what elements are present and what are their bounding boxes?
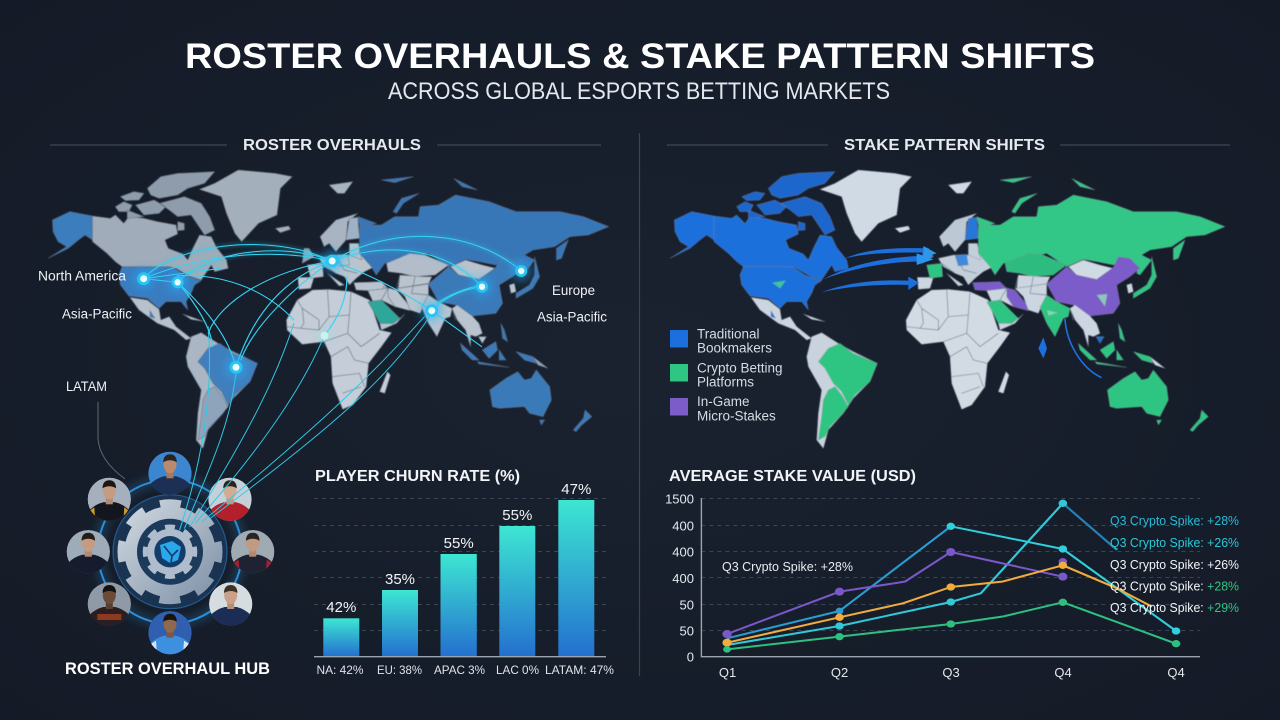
- bar: LAC: 55%: [502, 507, 532, 524]
- chart title: AVERAGE STAKE VALUE (USD): [669, 468, 916, 485]
- map labels: [38, 268, 607, 394]
- node: China: [473, 278, 491, 296]
- hub label: ROSTER OVERHAUL HUB: [65, 659, 270, 678]
- annotation: Q3 crypto spike: Q3 Crypto Spike: +28%: [722, 559, 853, 574]
- label: Asia-Pacific west: Asia-Pacific: [62, 306, 132, 322]
- node: North America East: [169, 273, 187, 291]
- bar: NA: [323, 599, 359, 656]
- player avatar 6: [88, 582, 131, 626]
- x axis labels: Q3: [942, 665, 960, 680]
- y axis labels: 400: [672, 571, 694, 586]
- bar: LATAM: 47%: [561, 481, 591, 498]
- annotation list: crypto spike by series: Q3 Crypto Spike: +29%: [1110, 600, 1239, 615]
- y axis labels: 0: [687, 650, 694, 664]
- bar: EU: 35%: [385, 571, 415, 588]
- x axis labels: Q4: [1054, 665, 1072, 680]
- x axis labels: Q1: [719, 665, 736, 680]
- x axis labels: Q2: [831, 665, 848, 680]
- y axis labels: [665, 492, 694, 664]
- annotation list: crypto spike by series: Q3 Crypto Spike: +26%: [1110, 535, 1239, 550]
- node: India: [422, 301, 442, 321]
- legend item: traditional bookmakers: Bookmakers: [697, 340, 772, 356]
- line chart: average stake value: [665, 468, 1239, 680]
- network: transfer connection lines: [144, 236, 521, 530]
- series: teal blue: [727, 503, 1117, 638]
- annotation list: crypto spike by series: [1110, 513, 1239, 615]
- annotation list: crypto spike by series: Q3 Crypto Spike: +26%: [1110, 557, 1239, 572]
- x axis labels: Q4: [1167, 665, 1185, 680]
- category labels: EU: 38%: [377, 665, 422, 677]
- node: North America West: [135, 270, 153, 288]
- icon: gear: [122, 503, 218, 600]
- player avatar 2: [208, 478, 252, 521]
- annotation list: crypto spike by series: Q3 Crypto Spike: +28%: [1110, 578, 1239, 594]
- hub ring: [98, 480, 242, 624]
- bar: APAC: [440, 535, 477, 656]
- node: Brazil: [226, 357, 246, 377]
- subtitle: ACROSS GLOBAL ESPORTS BETTING MARKETS: [388, 78, 890, 105]
- legend item: crypto betting platforms: Crypto Betting: [697, 360, 783, 376]
- y axis labels: 50: [680, 598, 694, 612]
- series: sky: [727, 501, 1066, 645]
- category labels: [316, 665, 614, 677]
- arrow: South Asia curve and marker: [1038, 319, 1101, 377]
- legend: betting platforms: [670, 326, 783, 424]
- map: roster overhauls world map: [48, 170, 609, 448]
- hub: roster overhaul hub: [65, 452, 274, 678]
- node: Africa: [318, 330, 330, 342]
- heading: stake pattern shifts: STAKE PATTERN SHIFTS: [844, 137, 1045, 154]
- node: Europe: [322, 251, 342, 271]
- bar chart: player churn rate: [314, 468, 614, 677]
- y axis labels: 400: [672, 544, 694, 560]
- network nodes: [135, 251, 530, 377]
- map: stake pattern shifts world map: [670, 170, 1225, 448]
- legend item: traditional bookmakers: Traditional: [697, 326, 760, 342]
- label: Asia-Pacific east: Asia-Pacific: [537, 310, 607, 324]
- bar: APAC: 55%: [444, 535, 474, 552]
- category labels: NA: 42%: [316, 665, 364, 677]
- y axis labels: 1500: [665, 492, 694, 506]
- legend item: traditional bookmakers: [670, 326, 772, 356]
- label: LATAM: LATAM: [66, 379, 107, 394]
- annotation list: crypto spike by series: Q3 Crypto Spike: +28%: [1110, 513, 1239, 528]
- legend item: in-game micro-stakes: [670, 394, 776, 424]
- bar: LATAM: [558, 481, 594, 656]
- series: orange: [724, 563, 1152, 646]
- label: Europe: Europe: [552, 283, 595, 298]
- series: green: [724, 600, 1179, 652]
- bar: LAC: [499, 507, 535, 656]
- heading: roster overhauls: ROSTER OVERHAULS: [243, 137, 421, 154]
- title: ROSTER OVERHAULS & STAKE PATTERN SHIFTS: [185, 37, 1095, 76]
- player avatar 5: [148, 611, 192, 655]
- node: Japan: [512, 262, 530, 280]
- legend item: crypto betting platforms: Platforms: [697, 374, 754, 390]
- arrows: stake flows to Europe: [822, 246, 937, 292]
- category labels: LAC 0%: [496, 665, 539, 677]
- x axis labels: [719, 665, 1185, 680]
- legend item: in-game micro-stakes: In-Game: [697, 394, 750, 409]
- label: North America: North America: [38, 268, 127, 284]
- y axis labels: 50: [680, 624, 694, 638]
- chart title: PLAYER CHURN RATE (%): [315, 468, 520, 485]
- y axis labels: 400: [672, 518, 694, 534]
- legend item: crypto betting platforms: [670, 360, 783, 390]
- series: cyan: [948, 524, 1179, 634]
- legend item: in-game micro-stakes: Micro-Stakes: [697, 408, 776, 424]
- player avatar 7: [67, 530, 110, 574]
- player avatar 3: [231, 530, 274, 574]
- player avatar 4: [209, 582, 252, 626]
- bar: NA: 42%: [326, 599, 356, 616]
- bar: EU: [382, 571, 418, 656]
- category labels: LATAM: 47%: [545, 665, 614, 677]
- series: purple: [724, 549, 1066, 637]
- category labels: APAC 3%: [434, 665, 485, 677]
- LATAM callout line: [98, 402, 125, 479]
- player avatar 8: [88, 478, 131, 521]
- player avatar 1: [148, 452, 192, 495]
